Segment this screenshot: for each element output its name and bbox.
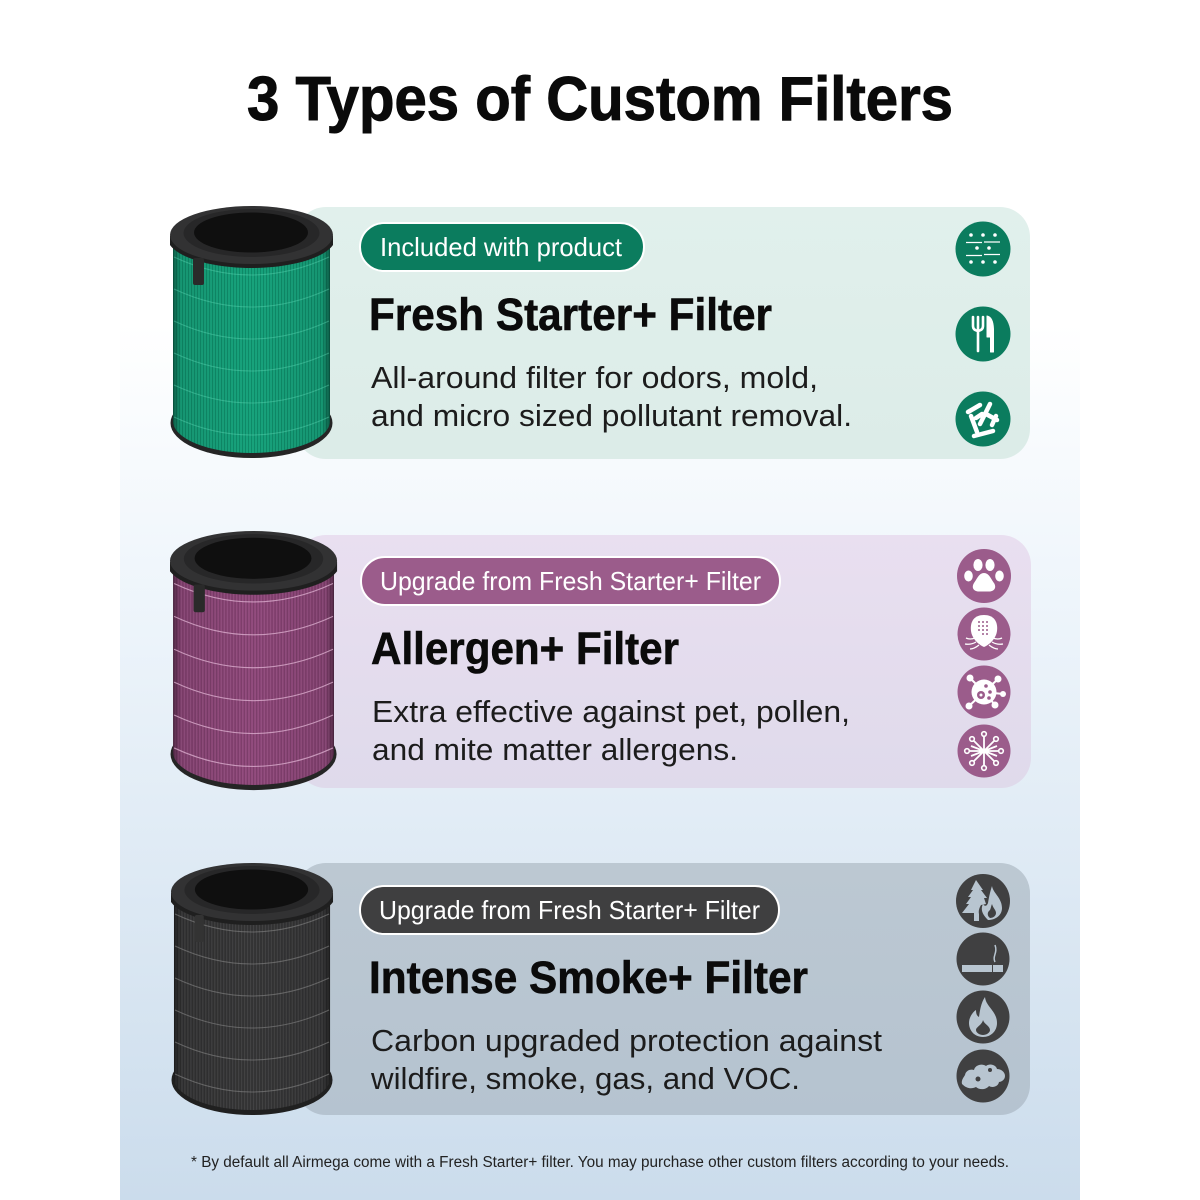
heading: Fresh Starter+ Filter: Fresh Starter+ Filter	[369, 289, 772, 340]
icon: flame	[956, 990, 1010, 1044]
icon: pollen	[958, 724, 1010, 778]
pill: Included with product	[360, 223, 644, 271]
pill: Included with product: Included with product	[380, 232, 623, 262]
pill: Upgrade from Fresh Starter+ Filter (purple)	[361, 557, 780, 605]
pill: Upgrade from Fresh Starter+ Filter (dark)	[360, 886, 779, 934]
panel: Intense Smoke+ Filter	[171, 863, 1030, 1115]
description: Allergen+: and mite matter allergens.	[372, 732, 738, 767]
description: Allergen+: Extra effective against pet, pollen,	[372, 694, 850, 729]
filter image: green	[170, 206, 333, 458]
page background	[120, 0, 1080, 1200]
footnote: * By default all Airmega come with a Fresh Starter+ filter. You may purchase other custom filters according to your needs.	[191, 1154, 1009, 1171]
icon: fork and knife	[956, 306, 1010, 362]
icon: cigarette	[956, 932, 1010, 986]
heading: Intense Smoke+ Filter: Intense Smoke+ Filter	[369, 952, 808, 1003]
description: Fresh Starter+: All-around filter for odors, mold,	[371, 360, 818, 395]
icon: dust mite	[958, 608, 1010, 660]
icon: mold	[956, 392, 1010, 446]
icon: wildfire	[956, 874, 1010, 928]
filter image: purple	[170, 531, 337, 790]
description: Fresh Starter+: and micro sized pollutant removal.	[371, 398, 852, 433]
icon: virus spore	[958, 666, 1010, 718]
description: Intense Smoke+: wildfire, smoke, gas, and VOC.	[370, 1061, 800, 1096]
pill: Upgrade from Fresh Starter+ Filter (purple): Upgrade from Fresh Starter+ Filter	[380, 566, 761, 596]
description: Fresh Starter+	[371, 360, 852, 433]
filter image: black	[171, 863, 333, 1115]
heading: Allergen+ Filter: Allergen+ Filter	[371, 623, 679, 674]
panel: Allergen+ Filter	[170, 531, 1031, 790]
title: 3 Types of Custom Filters	[247, 65, 953, 134]
description: Intense Smoke+: Carbon upgraded protection against	[371, 1023, 882, 1058]
panel: Fresh Starter+ Filter	[170, 206, 1030, 459]
icon: fine dust	[956, 222, 1010, 276]
icon: VOC gas cloud	[956, 1050, 1010, 1102]
pill: Upgrade from Fresh Starter+ Filter (dark): Upgrade from Fresh Starter+ Filter	[379, 895, 760, 925]
icon: paw	[957, 549, 1011, 603]
description: Intense Smoke+	[370, 1023, 882, 1096]
description: Allergen+	[372, 694, 850, 767]
